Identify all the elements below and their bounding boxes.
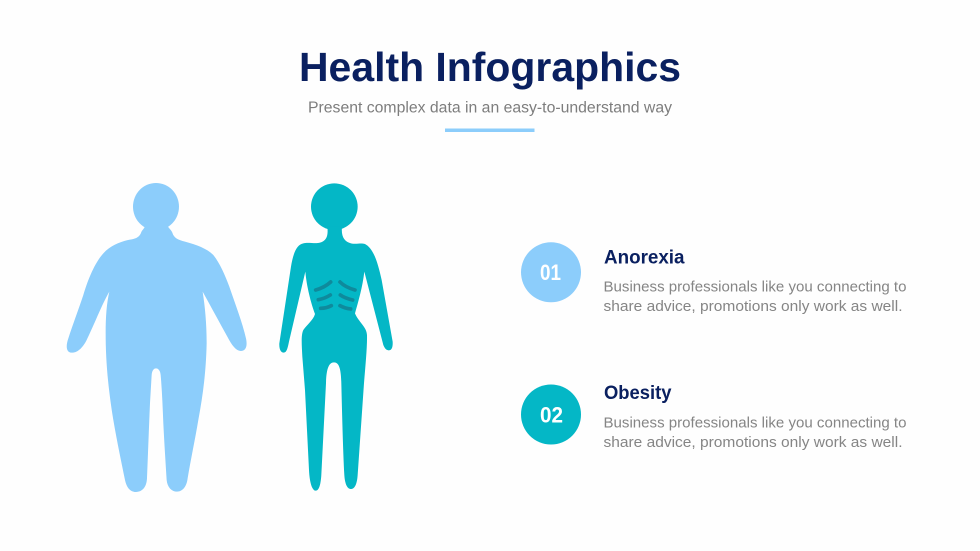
title: Health Infographics xyxy=(299,44,681,90)
badge 01: 01 xyxy=(540,260,561,285)
figure: anorexic body silhouette xyxy=(279,183,393,491)
title underline xyxy=(445,128,534,132)
badge 01 xyxy=(521,242,581,302)
heading: Obesity: Obesity xyxy=(604,383,672,404)
figure: obese body silhouette xyxy=(67,183,247,492)
body text 01: share advice, promotions only work as well. xyxy=(604,298,902,315)
badge 02 xyxy=(521,384,581,444)
heading: Anorexia: Anorexia xyxy=(604,248,685,268)
body text 02 xyxy=(604,414,906,451)
body text 02: Business professionals like you connecting to xyxy=(604,414,906,431)
body text 01 xyxy=(604,278,906,315)
item 02: Obesity xyxy=(521,383,906,451)
subtitle: Present complex data in an easy-to-understand way xyxy=(308,100,672,116)
body text 01: Business professionals like you connecting to xyxy=(604,278,906,296)
body text 02: share advice, promotions only work as well. xyxy=(604,434,902,451)
item 01: Anorexia xyxy=(521,242,906,315)
badge 02: 02 xyxy=(540,402,563,428)
icon: ribs xyxy=(316,282,355,309)
